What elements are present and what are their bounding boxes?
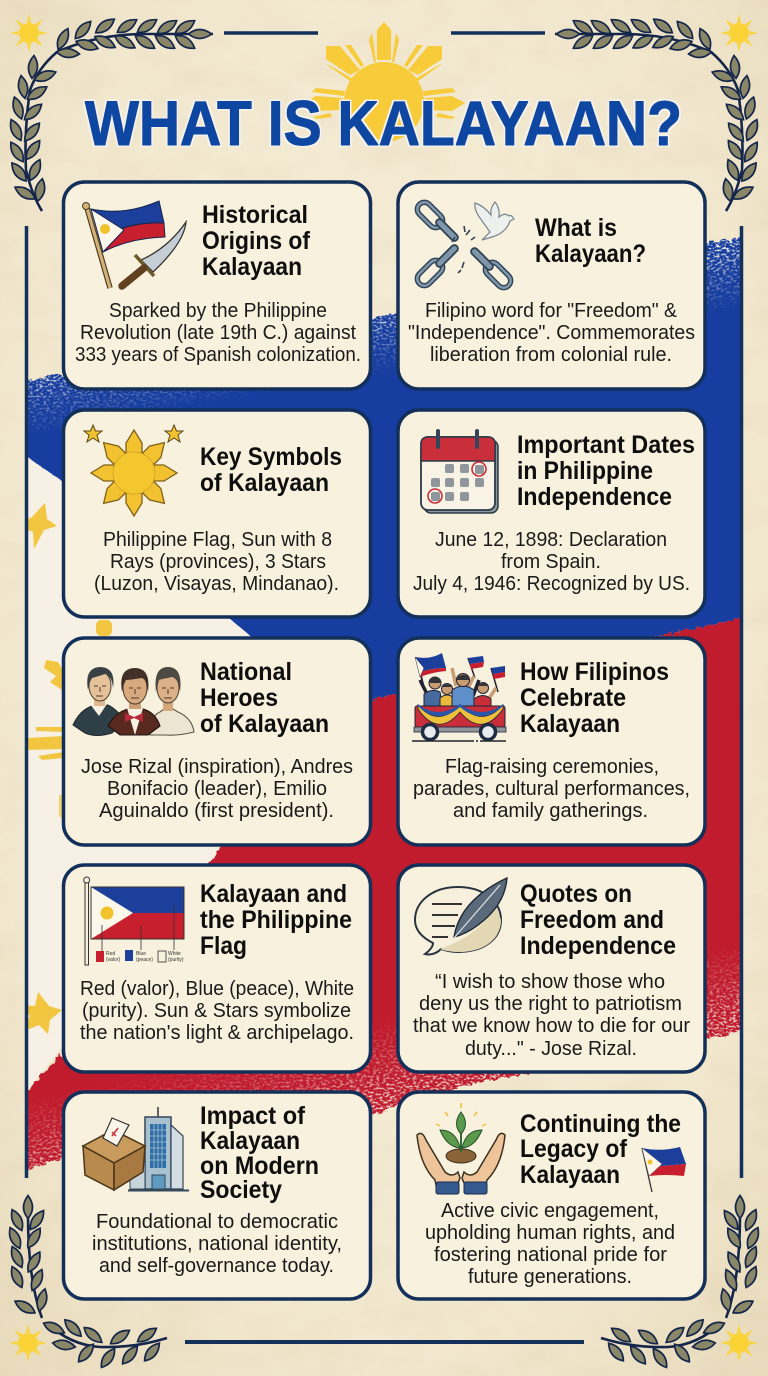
icon: hero in dark suit [73,667,124,736]
body text: that we know how to die for our [413,1015,690,1037]
icon: calendar [421,431,498,513]
laurel: bottom right [601,1196,762,1370]
icon: flag with colour legend: Red [106,951,115,957]
body text [94,529,339,595]
body text: Red (valor), Blue (peace), White [80,978,354,1000]
heading: Legacy of [520,1136,628,1163]
panel: kalayaan and the flag [64,865,370,1072]
background: Philippine flag wash [16,230,750,1180]
body text: and family gatherings. [453,800,648,822]
corner sun: top right [720,14,758,52]
heading [517,432,695,511]
heading: Important Dates [517,432,695,459]
icon: flag with colour legend: White [168,951,181,957]
heading: Celebrate [520,685,626,712]
laurel: top right [555,16,761,211]
laurel: top left [7,16,213,211]
heading: Society [200,1177,282,1204]
heading: Flag [200,933,247,960]
body text: Rays (provinces), 3 Stars [110,551,326,573]
heading [200,659,329,738]
body text: future generations. [468,1266,632,1288]
title: WHAT IS KALAYAAN? [85,89,682,159]
icon: ballot box and building [83,1107,189,1190]
heading: Quotes on [520,881,632,908]
heading: Kalayaan and [200,881,347,908]
heading: Origins of [202,228,311,255]
body text [75,300,361,366]
body text [92,1211,342,1277]
body text: duty..." - Jose Rizal. [465,1038,637,1060]
body text: Philippine Flag, Sun with 8 [103,529,332,551]
body text: parades, cultural performances, [413,778,690,800]
body text: “I wish to show those who [435,971,665,993]
heading: Kalayaan [520,1162,620,1189]
panel: historical origins [64,182,370,389]
body text [408,300,695,366]
heading: of Kalayaan [200,470,329,497]
heading: What is [535,215,617,242]
panel: quotes [398,865,705,1072]
heading: Historical [202,202,308,229]
body text: and self-governance today. [99,1255,334,1277]
panel: how filipinos celebrate [398,638,705,845]
laurel: bottom left [6,1196,167,1370]
heading: Continuing the [520,1111,681,1138]
body text: Flag-raising ceremonies, [445,756,659,778]
heading [200,881,352,960]
body text: (purity). Sun & Stars symbolize [82,1000,351,1022]
heading: Kalayaan? [535,241,646,268]
heading: the Philippine [200,907,352,934]
icon: hero in barong [150,667,194,735]
heading: Independence [517,484,672,511]
body text: Revolution (late 19th C.) against [80,322,356,344]
body text: Filipino word for "Freedom" & [425,300,678,322]
body text [413,971,690,1060]
body text: "Independence". Commemorates [408,322,695,344]
body text: Foundational to democratic [96,1211,338,1233]
icon: flag with colour legend [84,877,184,965]
big sun behind title [303,22,465,142]
heading: Freedom and [520,907,664,934]
heading: of Kalayaan [200,711,329,738]
icon: speech bubble and quill [415,878,507,954]
panel: national heroes [64,638,370,845]
heading: Kalayaan [200,1128,300,1155]
heading: National [200,659,292,686]
panel: key symbols [64,410,370,617]
panel: impact on modern society [64,1092,370,1299]
heading [535,215,646,268]
heading [520,1111,681,1189]
body text: fostering national pride for [434,1244,667,1266]
heading: Kalayaan [202,254,302,281]
icon: flag with colour legend: Blue [136,951,146,957]
body text: from Spain. [501,551,601,573]
body text [80,978,354,1044]
body text: Bonifacio (leader), Emilio [107,778,327,800]
heading: on Modern [200,1153,319,1180]
heading: Impact of [200,1103,306,1130]
body text: June 12, 1898: Declaration [435,529,667,551]
body text: deny us the right to patriotism [419,993,682,1015]
body text [425,1200,675,1288]
icon: flag with colour legend: (purity) [168,957,184,963]
body text [81,756,353,822]
heading [200,1103,319,1204]
panel: continuing the legacy [398,1092,705,1299]
heading [520,881,676,960]
panel: what is kalayaan [398,182,705,389]
icon: parade float [412,653,507,741]
heading: How Filipinos [520,659,669,686]
body text: Aguinaldo (first president). [99,800,334,822]
icon: small flag [642,1147,686,1192]
panel: important dates [398,410,705,617]
body text [413,756,690,822]
heading: Independence [520,933,676,960]
icon: broken chain and dove [414,199,514,291]
body text: Active civic engagement, [441,1200,659,1222]
body text: Jose Rizal (inspiration), Andres [81,756,353,778]
corner sun: bottom left [9,1324,47,1362]
heading [520,659,669,738]
body text: (Luzon, Visayas, Mindanao). [94,573,339,595]
corner sun: bottom right [720,1324,758,1362]
body text: liberation from colonial rule. [430,344,672,366]
body text: the nation's light & archipelago. [80,1022,354,1044]
body text: institutions, national identity, [92,1233,342,1255]
body text: Sparked by the Philippine [109,300,327,322]
body text: upholding human rights, and [425,1222,675,1244]
heading: Heroes [200,685,278,712]
icon: hero with bow tie [108,668,160,735]
heading: in Philippine [517,458,653,485]
body text: July 4, 1946: Recognized by US. [413,573,690,595]
icon: hands with seedling [417,1103,505,1194]
icon: flag with colour legend: (valor) [106,957,121,963]
icon: three heroes [73,667,194,736]
body text [413,529,690,595]
heading [202,202,311,281]
heading: Key Symbols [200,444,342,471]
icon: flag and bolo [82,201,186,288]
heading: Kalayaan [520,711,620,738]
icon: flag with colour legend: (peace) [136,957,153,963]
icon: sun and stars [84,425,183,516]
corner sun: top left [10,14,48,52]
heading [200,444,342,497]
body text: 333 years of Spanish colonization. [75,344,361,366]
